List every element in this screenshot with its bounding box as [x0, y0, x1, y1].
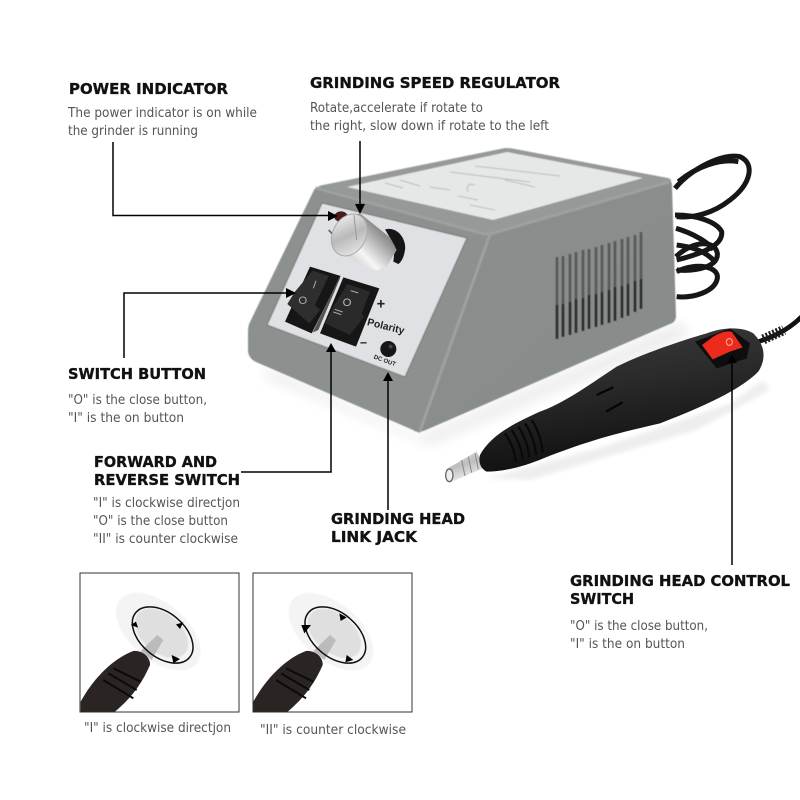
caption: counter clockwise: "II" is counter clockwise [260, 723, 406, 738]
arrow: speed regulator [355, 141, 365, 214]
label print [385, 166, 560, 210]
grinder control box [248, 148, 690, 445]
box top [318, 148, 671, 234]
speed knob [324, 208, 397, 271]
collet tip [446, 452, 485, 482]
caption: clockwise: "I" is clockwise directjon [84, 721, 231, 736]
callout: head control switch: SWITCH [570, 590, 634, 608]
callout: link jack [331, 510, 465, 546]
power indicator light [334, 211, 348, 222]
top label [347, 152, 643, 220]
box front [248, 187, 488, 433]
arrow: power indicator [113, 142, 338, 221]
polarity label: + [377, 296, 385, 312]
red rocker switch [695, 328, 750, 368]
front panel controls [285, 208, 406, 368]
callout: power indicator: POWER INDICATOR [69, 80, 228, 98]
handpiece [446, 317, 800, 482]
handpiece body [479, 328, 764, 472]
polarity label: Polarity [366, 317, 406, 337]
switch: direction: O [343, 297, 352, 309]
disc blur [102, 578, 215, 686]
rotation ring clockwise [122, 596, 204, 674]
callout: speed regulator: GRINDING SPEED REGULATOR [310, 74, 560, 92]
box shadow [260, 322, 690, 445]
callout: speed regulator [310, 74, 560, 134]
switch: power [285, 267, 341, 333]
connector lines and arrows [113, 141, 737, 565]
pen head [253, 651, 323, 712]
vent slots [557, 232, 641, 339]
callout: head control switch: "I" is the on button [570, 637, 685, 652]
callout: forward and reverse switch [93, 453, 240, 547]
callout: link jack: GRINDING HEAD [331, 510, 465, 528]
bevel highlights [316, 182, 669, 431]
handpiece shadow [487, 380, 770, 480]
panel: counter clockwise photo [253, 573, 412, 712]
pen head [81, 651, 150, 712]
callout: link jack: LINK JACK [331, 528, 418, 546]
arrow: forward and reverse [241, 343, 336, 472]
tip [313, 635, 336, 660]
arrow: switch button [124, 288, 296, 358]
callout: switch button: SWITCH BUTTON [68, 365, 206, 383]
callout: switch button [68, 365, 207, 426]
callout: power indicator: The power indicator is on while [67, 106, 257, 121]
arrow: control switch [727, 355, 737, 565]
callout: speed regulator: Rotate,accelerate if rotate to [310, 101, 483, 116]
grip ridges [505, 420, 543, 462]
power cord behind unit [675, 156, 749, 297]
callout: forward and reverse switch: "O" is the close button [93, 514, 228, 529]
switch: power: O [298, 295, 307, 307]
callout: speed regulator: the right, slow down if rotate to the left [310, 119, 549, 134]
tip [141, 635, 163, 660]
dc out jack [373, 341, 397, 368]
rotation ring counter clockwise [294, 596, 376, 674]
switch: direction [320, 277, 379, 347]
callout: head control switch: GRINDING HEAD CONTROL [570, 572, 790, 590]
callout: forward and reverse switch: "I" is clockwise directjon [93, 496, 240, 511]
callout: power indicator: the grinder is running [68, 124, 198, 139]
dc out jack: DC OUT [373, 355, 397, 368]
speed scale arc [385, 229, 405, 264]
arrow: link jack [383, 372, 393, 510]
box side [414, 180, 676, 432]
callout: head control switch: "O" is the close button, [570, 619, 708, 634]
handpiece cord [758, 317, 800, 342]
callout: head control switch [570, 572, 790, 652]
polarity label [360, 296, 406, 350]
polarity label: – [360, 336, 367, 350]
callout: forward and reverse switch: FORWARD AND [94, 453, 217, 471]
front panel [267, 203, 467, 377]
disc blur [274, 578, 388, 686]
callout: switch button: "O" is the close button, [68, 393, 207, 408]
callout: switch button: "I" is the on button [68, 411, 184, 426]
callout: power indicator [67, 80, 257, 139]
callout: forward and reverse switch: REVERSE SWITCH [94, 471, 240, 489]
callout: forward and reverse switch: "II" is counter clockwise [93, 532, 238, 547]
panel: clockwise photo [80, 573, 239, 712]
